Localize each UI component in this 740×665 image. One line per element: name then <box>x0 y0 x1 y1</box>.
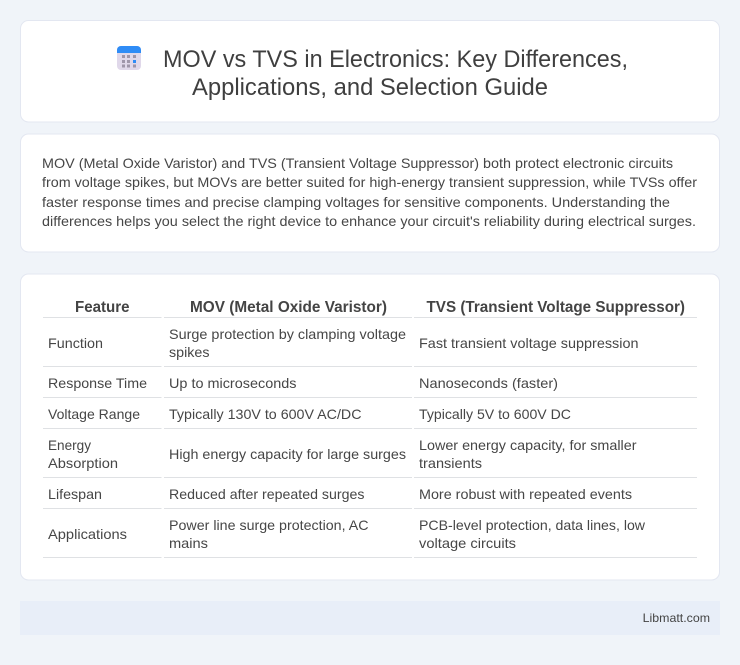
table row: function <box>48 326 638 360</box>
text block: introduction: differences helps you select the right device to enhance your circuit's reliability during electrical surges. <box>42 213 696 229</box>
table row: applications: mains <box>169 535 208 551</box>
table row: function: Surge protection by clamping voltage <box>169 326 406 342</box>
panel: comparison table <box>20 274 720 580</box>
table row: energy absorption: transients <box>419 455 482 471</box>
table row: applications: Power line surge protection, AC <box>169 517 368 533</box>
text block: introduction: faster response times and precise clamping voltages for sensitive components. Understanding the <box>42 194 670 210</box>
table row: voltage range: Typically 5V to 600V DC <box>419 406 571 422</box>
title: MOV vs TVS in Electronics: Key Differences, <box>163 46 628 73</box>
table row: lifespan <box>48 486 632 502</box>
text block: introduction: MOV (Metal Oxide Varistor) and TVS (Transient Voltage Suppressor) both protect electronic circuits <box>42 155 673 171</box>
table row: voltage range: Voltage Range <box>48 406 140 422</box>
table row: response time: Up to microseconds <box>169 375 296 391</box>
table header <box>75 299 685 316</box>
table row: response time: Nanoseconds (faster) <box>419 375 558 391</box>
table row: energy absorption: Lower energy capacity, for smaller <box>419 437 637 453</box>
table row: voltage range <box>48 406 571 422</box>
table row: energy absorption <box>48 437 637 471</box>
table row: lifespan: Lifespan <box>48 486 102 502</box>
text block: introduction: from voltage spikes, but MOVs are better suited for high-energy transient suppression, while TVSs offer <box>42 174 697 190</box>
table row: lifespan: More robust with repeated events <box>419 486 632 502</box>
table header: Feature <box>75 299 130 316</box>
title <box>163 46 628 101</box>
table row: response time: Response Time <box>48 375 147 391</box>
table row: energy absorption: High energy capacity for large surges <box>169 446 406 462</box>
table row: applications: PCB-level protection, data lines, low <box>419 517 646 533</box>
panel: title card <box>20 20 720 122</box>
table row: energy absorption: Absorption <box>48 455 118 471</box>
table row: energy absorption: Energy <box>48 437 91 453</box>
icon: calendar <box>117 46 141 70</box>
table header: MOV (Metal Oxide Varistor) <box>190 299 387 316</box>
table row: function: Fast transient voltage suppression <box>419 335 638 351</box>
table row: function: Function <box>48 335 103 351</box>
table row: lifespan: Reduced after repeated surges <box>169 486 364 502</box>
title: Applications, and Selection Guide <box>192 74 548 101</box>
table row: function: spikes <box>169 344 210 360</box>
text block: introduction <box>42 155 697 229</box>
panel: introduction <box>20 134 720 252</box>
table row: voltage range: Typically 130V to 600V AC/DC <box>169 406 362 422</box>
footer: Libmatt.com <box>643 611 710 625</box>
table row: response time <box>48 375 558 391</box>
footer <box>20 601 720 635</box>
table row: applications <box>48 517 646 551</box>
table header: TVS (Transient Voltage Suppressor) <box>426 299 685 316</box>
table row: applications: voltage circuits <box>419 535 516 551</box>
table row: applications: Applications <box>48 526 127 542</box>
